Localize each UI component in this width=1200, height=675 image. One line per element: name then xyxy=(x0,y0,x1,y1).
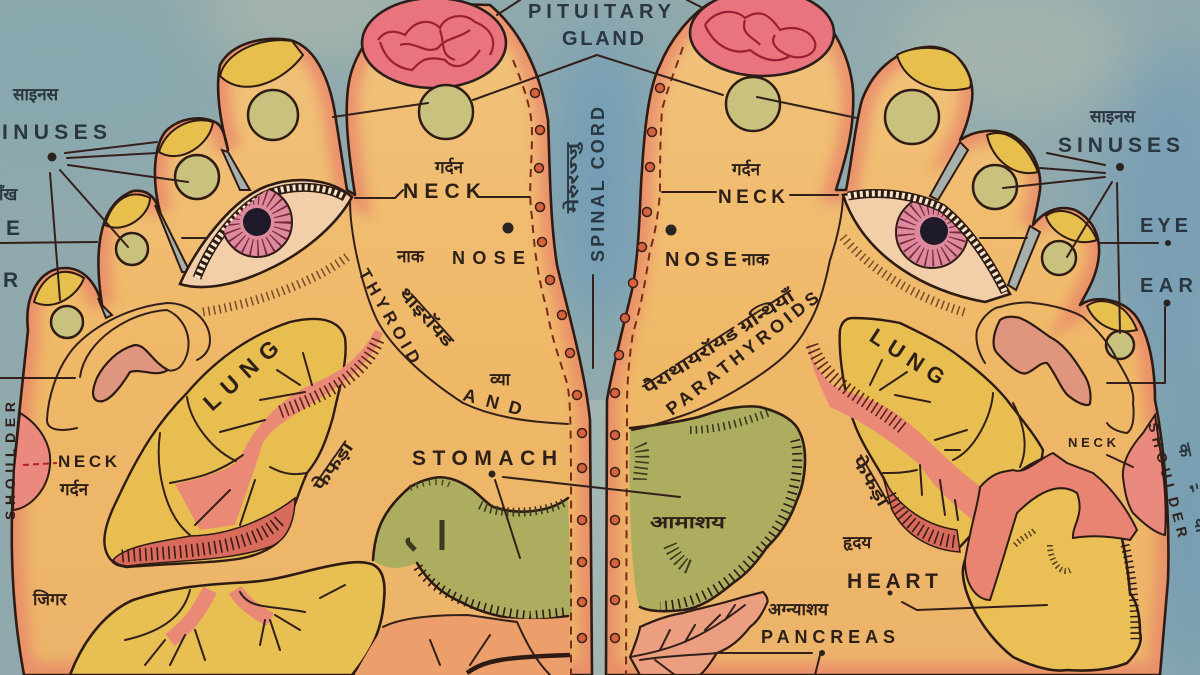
left pancreas xyxy=(355,615,572,675)
labels: PARATHYROIDS xyxy=(662,288,823,419)
left shoulder xyxy=(13,413,50,510)
heart xyxy=(963,453,1141,671)
labels: फेफड़ा xyxy=(847,449,897,511)
labels: SHOULDER xyxy=(2,402,18,520)
right stomach xyxy=(629,406,805,611)
labels: E xyxy=(6,217,20,240)
right eye xyxy=(843,192,1010,302)
labels: EAR xyxy=(1140,275,1194,297)
neck and thyroid lines xyxy=(350,190,568,424)
spine dots xyxy=(530,84,664,642)
toe nails xyxy=(34,40,303,305)
right big toe brain xyxy=(690,0,834,76)
labels: SINUSES xyxy=(1058,134,1180,157)
labels: SPINAL CORD xyxy=(588,107,608,262)
toe gaps xyxy=(98,150,250,318)
left foot xyxy=(12,0,592,675)
lobes xyxy=(883,393,1025,473)
labels: व्या xyxy=(489,365,511,390)
labels: THYROID xyxy=(355,266,424,367)
right shoulder xyxy=(1123,415,1166,535)
labels: थाइरॉयड xyxy=(394,281,462,352)
left ear xyxy=(47,303,210,430)
toe circles xyxy=(726,77,1134,359)
left big toe brain xyxy=(362,0,506,88)
labels: नाक xyxy=(741,245,770,270)
labels: NECK xyxy=(718,187,785,208)
right spine dashed line xyxy=(626,47,683,675)
labels: गर्दन xyxy=(59,475,89,500)
pink edge shading xyxy=(606,0,1168,675)
labels: NOSE xyxy=(665,249,737,271)
right ear xyxy=(976,302,1134,433)
toe gaps xyxy=(930,142,1040,290)
label dots xyxy=(48,152,1171,656)
bronchus xyxy=(175,330,383,530)
lobes xyxy=(159,397,307,535)
labels: PITUITARY xyxy=(528,1,672,23)
labels: हृदय xyxy=(842,528,872,553)
neck and parathyroid lines xyxy=(632,192,843,430)
right lung xyxy=(807,318,1043,552)
labels: NECK xyxy=(1068,435,1117,450)
toe nails xyxy=(897,48,1137,331)
bronchus xyxy=(807,337,985,530)
labels: मेरुरज्जु xyxy=(558,141,583,214)
labels: NOSE xyxy=(452,248,525,268)
labels: साइनस xyxy=(1089,102,1137,127)
left liver xyxy=(70,562,384,675)
labels: SHOULDER xyxy=(1145,421,1191,539)
labels: फेफड़ा xyxy=(305,435,358,496)
pink edge shading xyxy=(12,3,592,675)
lung label: LUNG xyxy=(865,323,949,390)
labels: NECK xyxy=(58,452,118,471)
labels: NECK xyxy=(403,180,481,203)
lung hatch band xyxy=(883,477,960,552)
labels: PANCREAS xyxy=(761,627,895,647)
labels: अग्न्याशय xyxy=(768,595,829,620)
labels: STOMACH xyxy=(412,447,557,470)
labels: R xyxy=(3,269,18,292)
heart muscle marks xyxy=(1125,545,1135,640)
labels: साइनस xyxy=(12,80,60,105)
labels: गर्दन xyxy=(731,155,761,180)
right foot xyxy=(606,0,1168,675)
labels: जिगर xyxy=(32,585,68,610)
labels: EYE xyxy=(1140,215,1188,237)
labels: गर्दन xyxy=(434,153,464,178)
shoulder neck dashed xyxy=(23,463,57,465)
labels: नाक xyxy=(396,242,425,267)
left stomach xyxy=(373,477,572,621)
labels: INUSES xyxy=(2,121,107,144)
labels: आमाशय xyxy=(650,508,727,533)
right pancreas xyxy=(630,592,768,675)
lung label: LUNG xyxy=(198,335,284,416)
left spine dashed line xyxy=(513,60,571,675)
liver vessels xyxy=(170,590,270,640)
left lung xyxy=(104,319,383,567)
lung hatch band xyxy=(113,498,295,566)
labels: HEART xyxy=(847,570,938,593)
labels: पैराथायरॉयड ग्रन्थियाँ xyxy=(636,281,801,400)
aorta xyxy=(965,453,1137,600)
left eye xyxy=(180,180,352,287)
labels: GLAND xyxy=(562,28,644,50)
toe circles xyxy=(51,85,473,338)
left eyelash row xyxy=(203,257,347,312)
labels: AND xyxy=(461,385,524,419)
right eyelash row xyxy=(843,237,967,313)
